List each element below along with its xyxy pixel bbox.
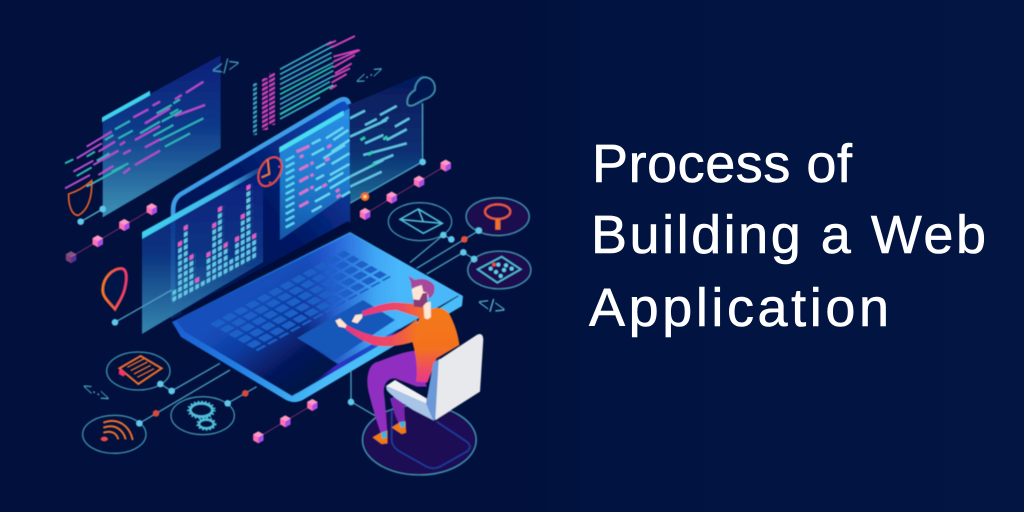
keyboard bbox=[208, 250, 391, 352]
icon: code tag lower right: </> bbox=[478, 291, 505, 321]
icon: cloud with connector bbox=[350, 77, 435, 203]
chair bbox=[386, 334, 483, 421]
neck and head bbox=[412, 283, 431, 319]
icon: magnifier in ring bbox=[466, 198, 529, 236]
panel: top striped code block bbox=[253, 36, 360, 135]
hair and cap bbox=[408, 276, 435, 298]
shoes bbox=[373, 421, 406, 444]
panel: left floating code window bbox=[65, 55, 221, 217]
title line 3: Application bbox=[589, 278, 889, 338]
icon: code tag above left window: </> bbox=[212, 52, 239, 82]
icon: calendar grid in ring bbox=[468, 251, 531, 289]
icon: map pin with connector bbox=[103, 268, 172, 326]
cubes: upper right chain bbox=[360, 160, 451, 220]
panel: bar chart window bbox=[142, 166, 263, 334]
icon: clock bbox=[254, 153, 286, 190]
far arm bbox=[362, 302, 428, 318]
chair seat bbox=[386, 380, 427, 404]
torso bbox=[412, 308, 459, 383]
icon: wifi in ring bbox=[83, 415, 146, 453]
icon: double arrow lower left: <··> bbox=[83, 377, 109, 408]
title line 1: Process of bbox=[592, 134, 853, 194]
cubes: upper left chain bbox=[66, 203, 157, 263]
icon: envelope in ring bbox=[388, 203, 452, 241]
connectors: lower left icons to laptop bbox=[136, 363, 257, 427]
socks bbox=[381, 421, 405, 439]
laptop bbox=[172, 99, 463, 402]
chair back bbox=[435, 334, 483, 420]
title bbox=[589, 134, 986, 338]
icon: document in ring bbox=[107, 352, 170, 390]
panel: right code window behind laptop bbox=[348, 73, 423, 203]
near arm bbox=[345, 319, 420, 346]
person at laptop bbox=[335, 276, 459, 444]
icon: double arrow top: <··> bbox=[356, 60, 382, 91]
panel: code window on screen bbox=[279, 108, 350, 240]
icon: shield with connector bbox=[69, 181, 106, 225]
beard bbox=[413, 293, 427, 307]
connectors: right side icons to laptop bbox=[410, 227, 482, 274]
far leg bbox=[390, 393, 405, 425]
near leg bbox=[367, 351, 427, 434]
illustration bbox=[65, 36, 531, 475]
cubes: lower chain bbox=[253, 399, 318, 443]
hands bbox=[335, 314, 362, 328]
icon: gears in ring bbox=[171, 397, 234, 435]
laptop screen bbox=[172, 99, 350, 318]
laptop base bbox=[172, 232, 463, 402]
bar chart dots bbox=[172, 180, 258, 304]
floor disc with connector bbox=[348, 370, 476, 475]
chair back edge bbox=[426, 358, 440, 421]
trackpad bbox=[297, 300, 395, 360]
title line 2: Building a Web bbox=[591, 205, 986, 265]
